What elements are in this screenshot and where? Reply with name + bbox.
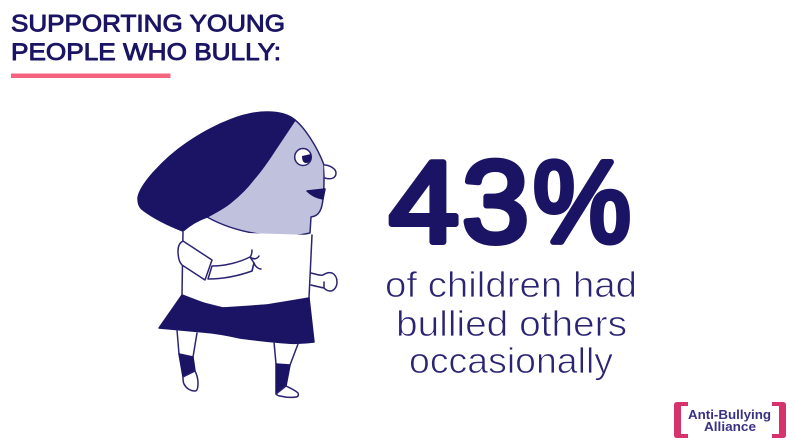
- left leg: [177, 330, 198, 391]
- illustration: child figure: [138, 112, 337, 397]
- nose: [324, 165, 336, 179]
- face: [207, 120, 324, 236]
- statistic description: of children had: [385, 264, 637, 305]
- title: [11, 10, 285, 66]
- logo wordmark: [688, 408, 771, 434]
- right leg: [274, 342, 298, 397]
- statistic description: bullied others: [396, 303, 627, 344]
- statistic 43%: %: [533, 137, 631, 267]
- title: SUPPORTING YOUNG: [11, 10, 285, 38]
- logo brackets: [674, 402, 786, 438]
- logo wordmark: Alliance: [704, 420, 756, 434]
- statistic description: [385, 264, 637, 381]
- logo: Anti-Bullying Alliance: [674, 402, 786, 438]
- mouth: [307, 189, 325, 199]
- hair: [138, 112, 295, 231]
- logo wordmark: Anti-Bullying: [688, 408, 771, 422]
- statistic 43%: 4: [389, 137, 459, 267]
- far hand: [311, 273, 337, 291]
- statistic description: occasionally: [409, 340, 613, 381]
- skirt: [159, 295, 314, 343]
- statistic 43%: 3: [462, 137, 529, 267]
- title: PEOPLE WHO BULLY:: [11, 39, 281, 66]
- title underline: [11, 74, 170, 78]
- statistic 43%: [389, 137, 631, 267]
- torso: [182, 231, 312, 308]
- near arm: [178, 241, 261, 280]
- eye: [295, 148, 311, 166]
